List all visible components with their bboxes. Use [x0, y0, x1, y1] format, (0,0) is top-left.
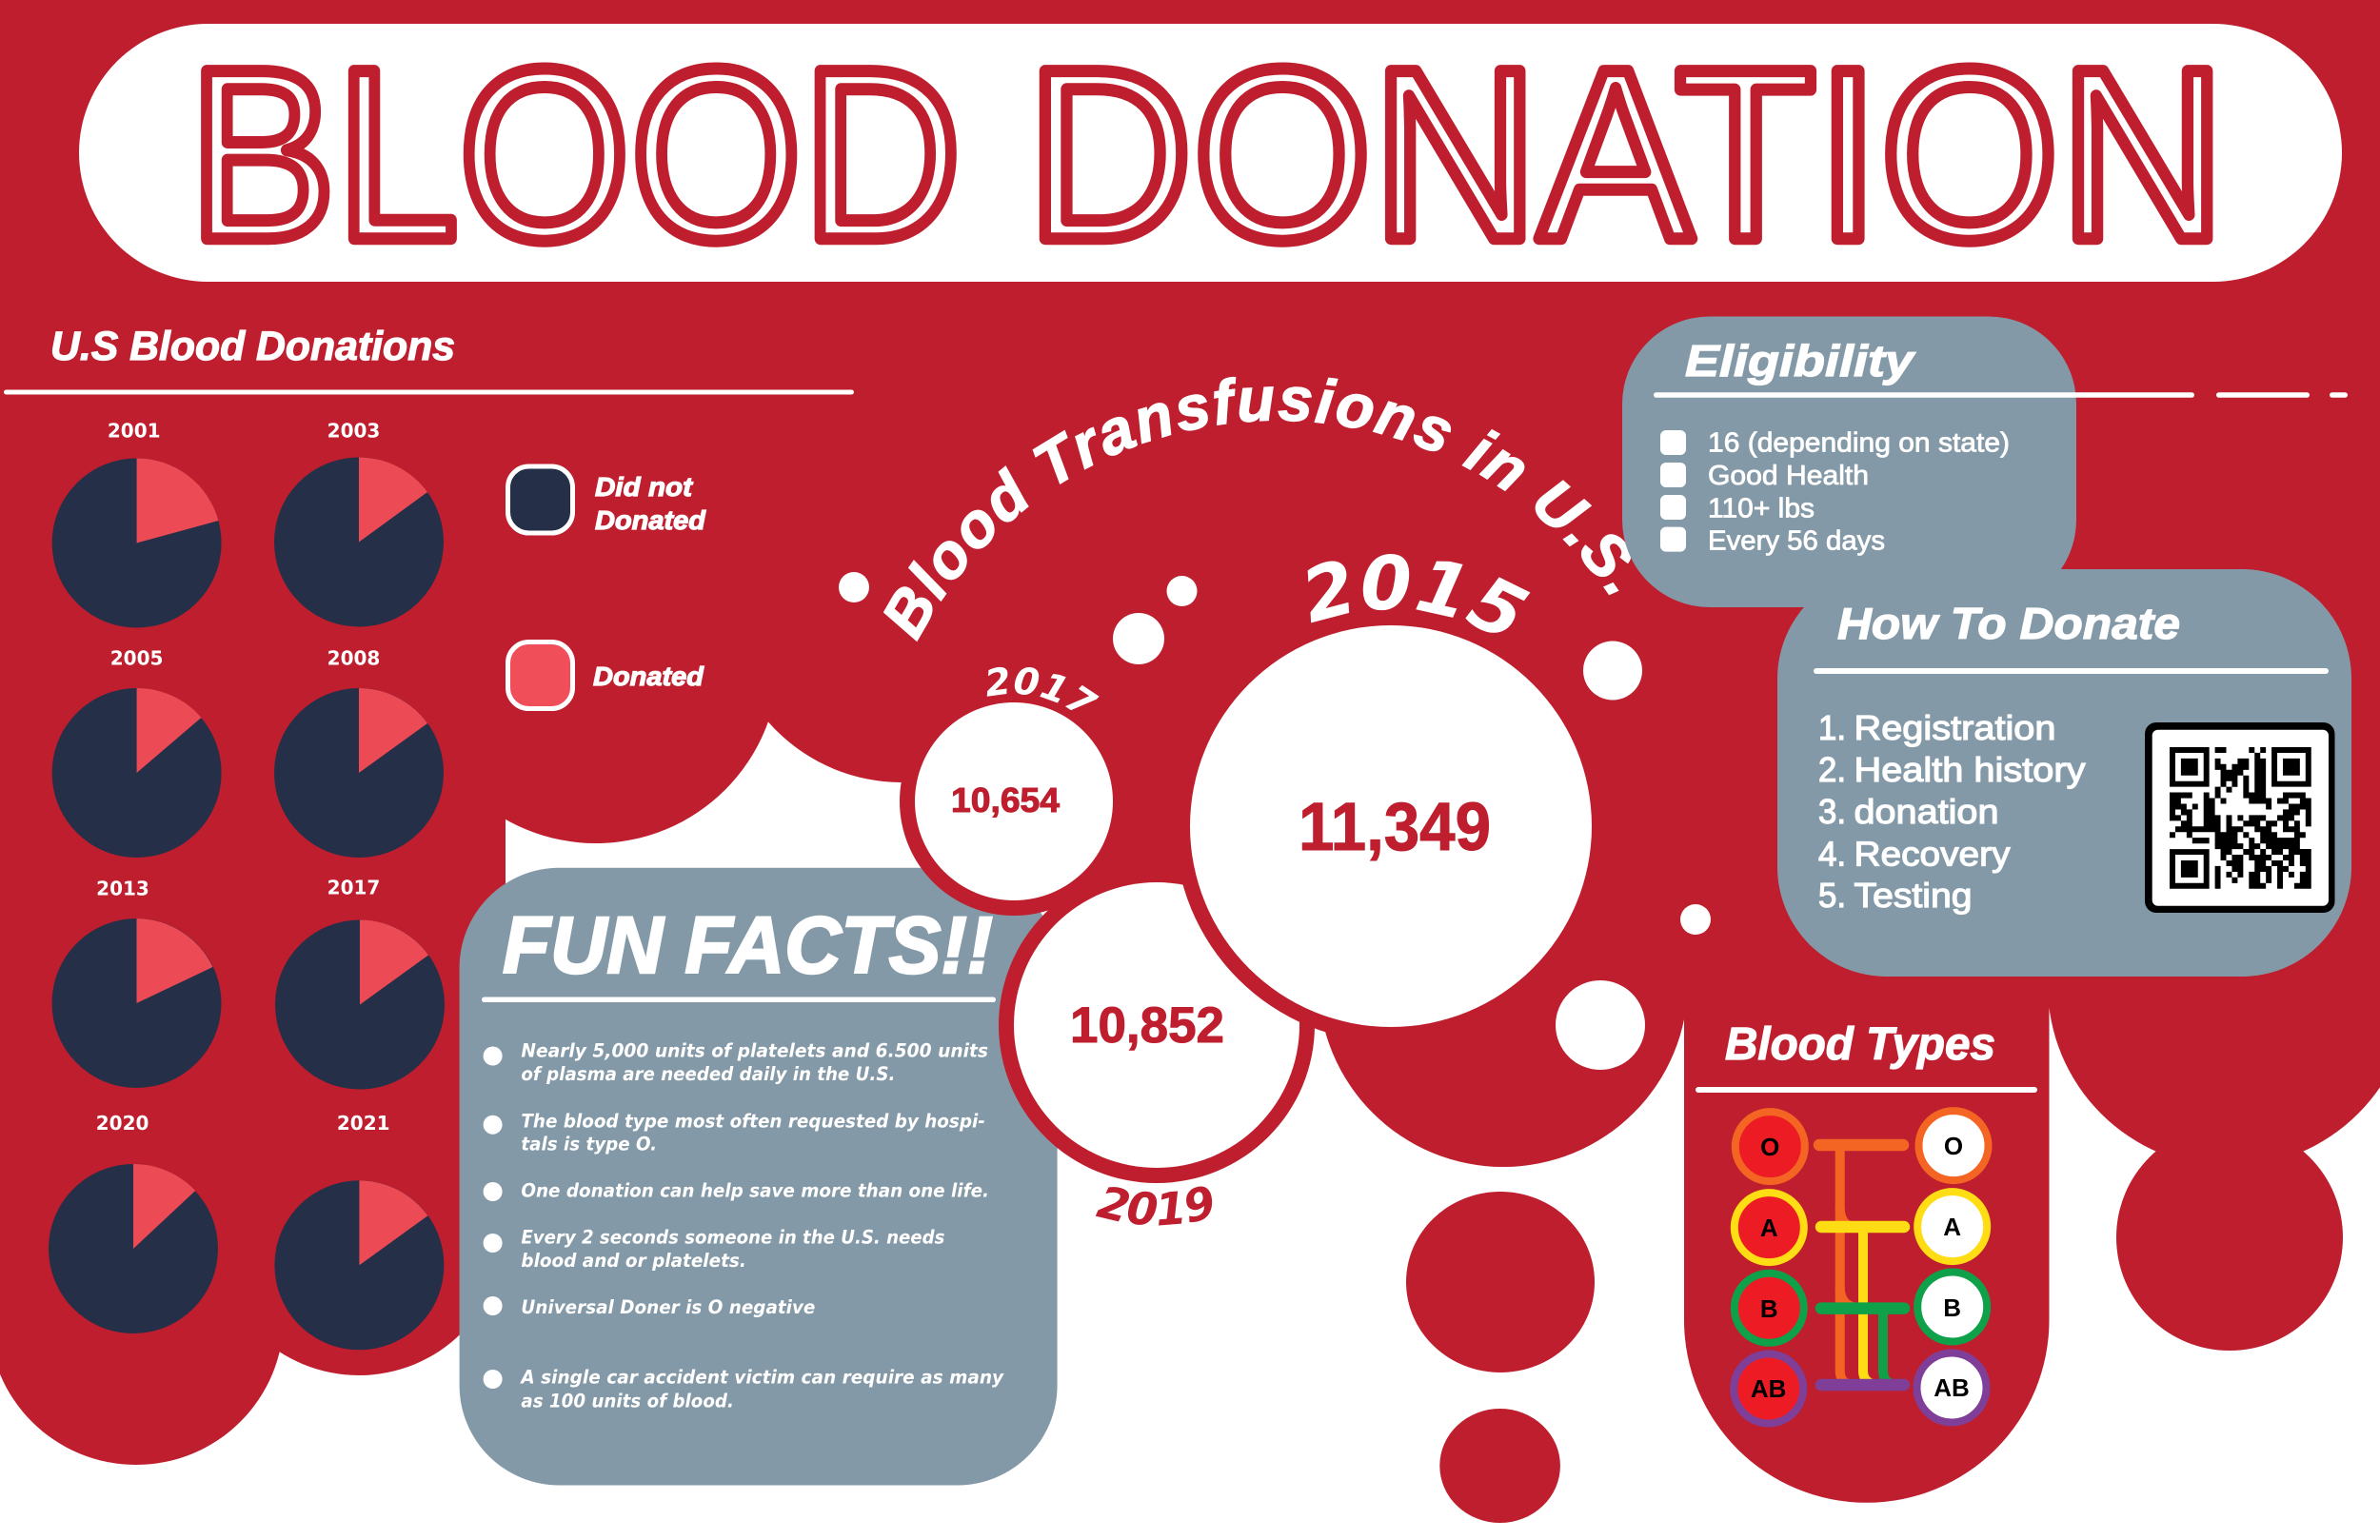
- blood type labels: AB: [1934, 1373, 1970, 1402]
- steps list: Registration: [1854, 708, 2056, 747]
- panel: fun facts: [460, 868, 1058, 1485]
- fact text: [520, 1039, 1004, 1412]
- pie chart 2003: 2003: [327, 420, 380, 443]
- pie chart 2021: 2021: [337, 1112, 390, 1135]
- pie chart 2020: [49, 1112, 218, 1333]
- donor circles: [1734, 1112, 1805, 1424]
- title text: BLOOD: [188, 19, 962, 291]
- bubble: 2019: 2019: [1095, 1186, 1213, 1226]
- bubble: 2019: 10,852: [1070, 997, 1224, 1054]
- pie chart 2005: [52, 646, 222, 858]
- legend: did not donated: Donated: [595, 505, 706, 535]
- QR code: [2145, 722, 2334, 913]
- blood type labels: O: [1944, 1132, 1963, 1160]
- fact text: One donation can help save more than one life.: [521, 1180, 989, 1201]
- decorative white dots: [839, 572, 1711, 1070]
- heading: U.S Blood Donations: U.S Blood Donations: [50, 324, 455, 369]
- steps list: 2.: [1818, 750, 1846, 789]
- fact bullets: [484, 1047, 503, 1389]
- steps list: [1818, 708, 2085, 915]
- heading: how to donate: How To Donate: [1837, 599, 2180, 648]
- pie chart 2001: [52, 420, 222, 628]
- heading: blood types: Blood Types: [1725, 1019, 1995, 1070]
- panel: how to donate: [1777, 569, 2351, 977]
- checklist: 110+ lbs: [1708, 493, 1815, 523]
- bubble: 2017: 10,654: [951, 780, 1060, 819]
- pie chart 2021: [274, 1112, 444, 1350]
- panel: eligibility: [1622, 316, 2348, 607]
- fact text: of plasma are needed daily in the U.S.: [521, 1063, 895, 1085]
- pie chart 2020: 2020: [96, 1112, 149, 1135]
- blood type labels: B: [1943, 1293, 1961, 1322]
- heading: fun facts: FUN FACTS!!: [503, 900, 993, 990]
- steps list: 3.: [1818, 792, 1846, 831]
- bubble: 2019: [999, 882, 1315, 1226]
- pie chart 2017: 2017: [327, 877, 380, 899]
- steps list: Health history: [1854, 750, 2085, 789]
- pie chart 2013: [51, 878, 221, 1088]
- checklist: [1660, 428, 2010, 556]
- fact text: blood and or platelets.: [521, 1250, 746, 1272]
- compatibility connectors: [1819, 1145, 1904, 1385]
- pie chart 2013: 2013: [96, 878, 149, 900]
- pie chart 2003: [274, 420, 444, 626]
- steps list: donation: [1854, 792, 1999, 831]
- recipient circles: [1917, 1111, 1988, 1422]
- pie chart 2017: [275, 877, 445, 1089]
- legend: donated: [508, 642, 704, 708]
- panel: blood types: [1696, 1019, 2037, 1424]
- pie chart 2008: [274, 646, 444, 858]
- steps list: 4.: [1818, 835, 1846, 874]
- fact text: as 100 units of blood.: [521, 1390, 734, 1412]
- steps list: Testing: [1854, 876, 1973, 915]
- heading: Blood Transfusions in U.S. (curved): Blood Transfusions in U.S.: [883, 377, 1631, 642]
- blood type labels: A: [1760, 1214, 1778, 1242]
- fact text: Universal Doner is O negative: [521, 1296, 815, 1318]
- steps list: Recovery: [1854, 835, 2011, 874]
- bubble: 2017: 2017: [986, 666, 1100, 710]
- bubble: 2015: 11,349: [1299, 790, 1491, 865]
- blood type labels: AB: [1751, 1374, 1786, 1403]
- heading: eligibility: Eligibility: [1685, 336, 1916, 385]
- fact text: Nearly 5,000 units of platelets and 6.500 units: [521, 1039, 988, 1062]
- bubble: 2017: [900, 666, 1113, 916]
- fact text: tals is type O.: [521, 1133, 657, 1155]
- checklist: 16 (depending on state): [1708, 428, 2010, 459]
- legend: did not donated: Did not: [595, 472, 694, 502]
- legend: donated: Donated: [593, 661, 704, 691]
- panel: U.S blood donations: [4, 324, 854, 1350]
- fact text: A single car accident victim can require as many: [520, 1367, 1004, 1388]
- checklist: Good Health: [1708, 461, 1869, 491]
- legend: did not donated: [508, 466, 706, 535]
- title text: DONATION: [1026, 19, 2226, 291]
- blood type labels: A: [1943, 1213, 1961, 1241]
- title text: [188, 19, 2226, 291]
- bubble: 2015: [1182, 554, 1592, 1032]
- fact text: The blood type most often requested by hospi-: [521, 1110, 985, 1133]
- blood type labels: [1751, 1132, 1970, 1403]
- pie chart 2005: 2005: [110, 646, 163, 669]
- blood type labels: O: [1760, 1133, 1779, 1161]
- pie chart 2001: 2001: [108, 420, 161, 443]
- bubble: 2015: 2015: [1308, 554, 1531, 633]
- title pill: [79, 19, 2342, 291]
- blood type labels: B: [1760, 1294, 1778, 1323]
- pie chart 2008: 2008: [327, 646, 380, 669]
- fact text: Every 2 seconds someone in the U.S. needs: [521, 1226, 944, 1249]
- steps list: 5.: [1818, 876, 1846, 915]
- steps list: 1.: [1818, 708, 1846, 747]
- checklist: Every 56 days: [1708, 525, 1885, 556]
